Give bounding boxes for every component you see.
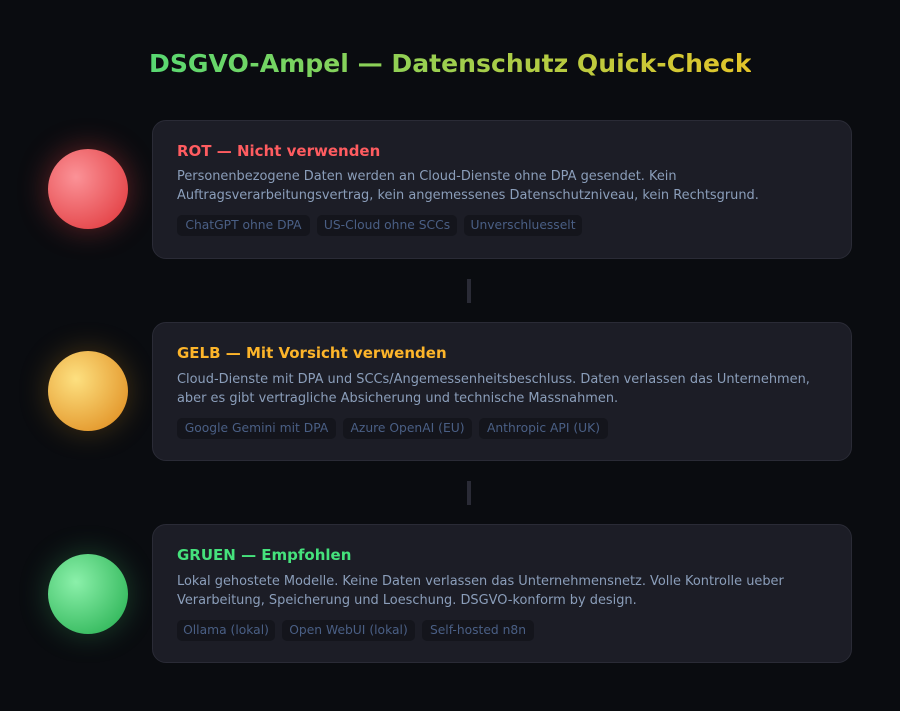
connector [467, 279, 471, 303]
panel: ROT [152, 120, 852, 259]
title: DSGVO-Ampel — Datenschutz Quick-Check [149, 49, 752, 78]
text: GRUEN description: Lokal gehostete Modelle. Keine Daten verlassen das Unternehmensnetz. Volle Kontrolle ueber [177, 574, 784, 589]
text: GRUEN description [177, 574, 784, 608]
text: GELB description: aber es gibt vertragliche Absicherung und technische Massnahmen. [177, 391, 618, 406]
tag: Google Gemini mit DPA [185, 421, 328, 435]
tag: Azure OpenAI (EU) [350, 421, 465, 435]
tag [317, 215, 457, 236]
tag: Open WebUI (lokal) [289, 623, 408, 637]
tag: US-Cloud ohne SCCs [324, 218, 450, 232]
tag [177, 215, 310, 236]
tag: Anthropic API (UK) [487, 421, 600, 435]
tag [343, 418, 472, 439]
traffic light: yellow [48, 351, 128, 431]
text: ROT description: Personenbezogene Daten werden an Cloud-Dienste ohne DPA gesendet. Kein [177, 169, 677, 184]
text: GELB description: Cloud-Dienste mit DPA und SCCs/Angemessenheitsbeschluss. Daten verlassen das Unternehmen, [177, 372, 810, 387]
text: GELB description [177, 372, 810, 406]
panel: GELB [152, 322, 852, 461]
tag: Self-hosted n8n [430, 623, 526, 637]
tag: Unverschluesselt [470, 218, 576, 232]
heading: ROT: ROT — Nicht verwenden [177, 142, 380, 160]
tag: Ollama (lokal) [183, 623, 269, 637]
traffic light: green [48, 554, 128, 634]
tag [422, 620, 534, 641]
traffic light: red [48, 149, 128, 229]
connector [467, 481, 471, 505]
tag [177, 620, 275, 641]
text: GRUEN description: Verarbeitung, Speicherung und Loeschung. DSGVO-konform by design. [177, 593, 637, 608]
tag [479, 418, 608, 439]
text: ROT description: Auftragsverarbeitungsvertrag, kein angemessenes Datenschutzniveau, kein Rechtsgrund. [177, 188, 759, 203]
panel: GRUEN [152, 524, 852, 663]
heading: GELB: GELB — Mit Vorsicht verwenden [177, 344, 447, 362]
tag [177, 418, 336, 439]
tag [464, 215, 582, 236]
text: ROT description [177, 169, 759, 203]
tag [282, 620, 415, 641]
heading: GRUEN: GRUEN — Empfohlen [177, 546, 351, 564]
tag: ChatGPT ohne DPA [185, 218, 302, 232]
